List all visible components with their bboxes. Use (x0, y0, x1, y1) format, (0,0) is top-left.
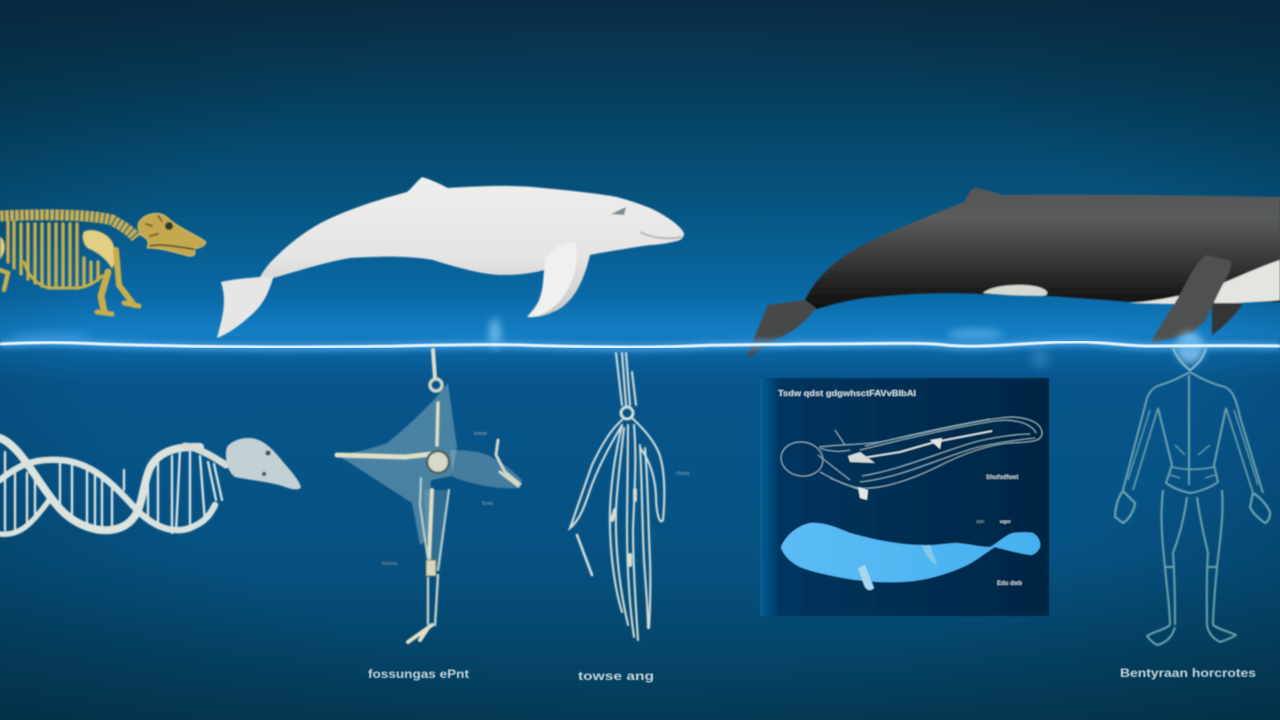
forelimb diagram A (337, 350, 522, 642)
DNA helix skeleton (0, 438, 301, 534)
front flipper (1150, 255, 1231, 344)
human skeleton outline (1115, 348, 1270, 645)
whale flipper (527, 243, 577, 317)
whale eye (611, 207, 626, 215)
hind legs (101, 272, 108, 311)
panel: comparison: Edu dwb (997, 581, 1022, 587)
white belly patches (1129, 260, 1280, 304)
caption: limb A: fossungas ePnt (368, 667, 469, 681)
bottom captions (368, 666, 1256, 683)
helix creature head (226, 438, 301, 489)
panel heading: Tsdw qdst gdgwhsctFAVvBIbAI (778, 389, 916, 398)
forelimb small labels: belows (382, 561, 398, 567)
forelimb small labels: fores (482, 501, 494, 507)
panel: comparison: Jum (976, 519, 985, 524)
forelimb small labels: cfowls (676, 471, 690, 477)
tail fluke (747, 300, 816, 359)
outline whale (779, 417, 1042, 490)
spine (0, 215, 136, 238)
black whale (747, 188, 1280, 359)
membrane (337, 383, 457, 545)
panel: comparison (760, 378, 1049, 616)
rear flipper (1212, 303, 1243, 335)
legs (1162, 490, 1187, 625)
caption: human: Bentyraan horcrotes (1120, 666, 1256, 680)
ribs (5, 450, 222, 533)
front leg fragment (0, 237, 5, 259)
helix strands (0, 438, 200, 530)
blue whale (781, 523, 1040, 582)
pelvis (83, 230, 115, 268)
panel: comparison: wgnr (999, 519, 1011, 524)
whale tail fluke (217, 277, 273, 338)
head and neck (1173, 348, 1206, 370)
forelimb small labels: towse (474, 431, 487, 437)
torso (1123, 372, 1263, 493)
limb bones (337, 350, 520, 642)
skull (138, 213, 206, 256)
fossil skeleton (0, 213, 206, 314)
hands (1115, 491, 1135, 523)
ribs (8, 222, 98, 288)
caption: limb B: towse ang (578, 669, 654, 683)
outline whale bone (850, 431, 992, 460)
panel labels: Shufsdfwet (986, 475, 1018, 481)
horizon glow line (0, 318, 1280, 368)
white whale (217, 177, 684, 338)
forelimb small labels (382, 431, 690, 567)
forelimb diagram B (570, 353, 664, 640)
feet (1147, 625, 1175, 645)
